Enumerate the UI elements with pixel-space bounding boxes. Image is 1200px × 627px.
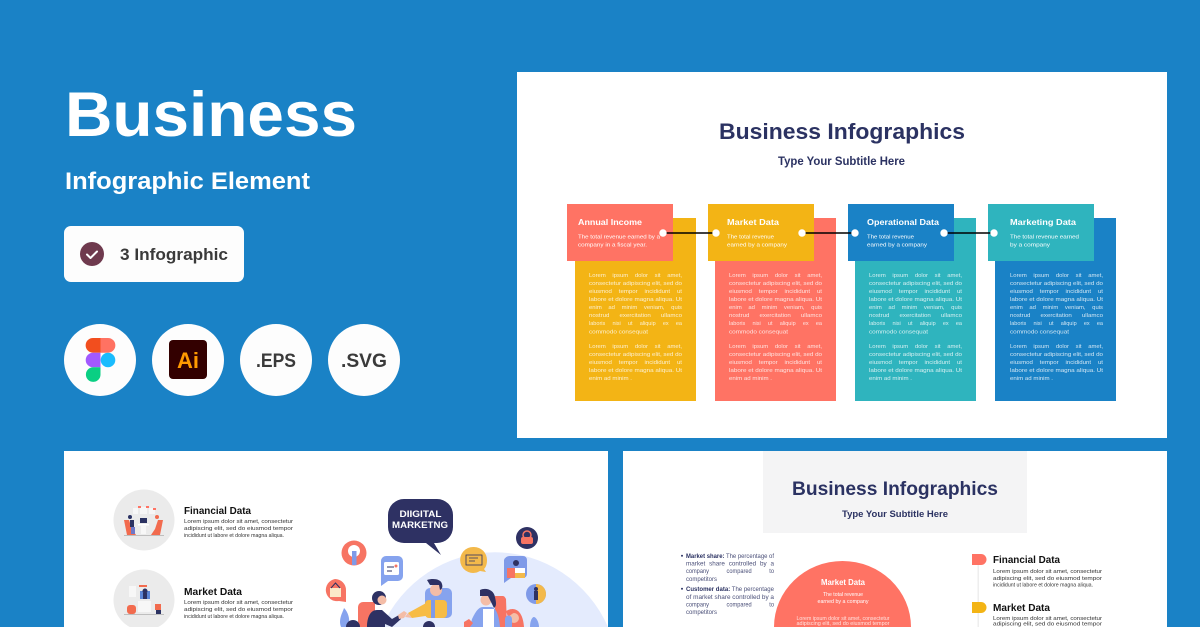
figure: woman in blue xyxy=(464,589,507,627)
icon: meeting illustration xyxy=(124,506,164,536)
bullet list: Customer data: The percentage xyxy=(686,587,775,593)
card: Operational Data: laboris nisi ut aliquip ex ea xyxy=(869,321,963,327)
figure: man in yellow xyxy=(405,579,452,618)
card: Operational Data: Operational Data xyxy=(867,217,939,227)
card: Marketing Data: consectetur adipiscing elit, sed do xyxy=(1010,281,1104,287)
card: Operational Data: eiusmod tempor incididunt ut xyxy=(869,360,962,366)
card: Market Data: enim ad minim . xyxy=(729,376,772,382)
item: Market Data: adipiscing elit, sed do eiusmod tempor xyxy=(184,607,293,613)
card: Marketing Data xyxy=(988,204,1116,401)
card: Market Data: earned by a company xyxy=(727,242,787,248)
card: Operational Data: consectetur adipiscing elit, sed do xyxy=(869,352,963,358)
icon: lock badge xyxy=(516,527,538,549)
item: Financial Data: incididunt ut labore et dolore magna aliqua. xyxy=(184,533,284,539)
icon: EPS xyxy=(240,324,312,396)
icon: location pin xyxy=(342,540,366,566)
card: Annual Income: Annual Income xyxy=(578,217,642,227)
icon: shop bubble xyxy=(326,579,346,602)
item: Market Data: Market Data xyxy=(184,586,242,598)
bullet list xyxy=(681,554,775,616)
item: Financial Data: incididunt ut labore et dolore magna aliqua. xyxy=(993,582,1093,588)
semicircle: Market Data xyxy=(774,561,911,627)
card: Marketing Data: The total revenue earned xyxy=(1010,234,1079,240)
card: Marketing Data: by a company xyxy=(1010,242,1050,248)
card: Annual Income: eiusmod tempor incididunt ut xyxy=(589,360,682,366)
card: Annual Income: laboris nisi ut aliquip ex ea xyxy=(589,321,683,327)
icon: EPS: .EPS xyxy=(256,351,296,372)
card: Operational Data: Lorem ipsum dolor sit amet, xyxy=(869,344,962,350)
card: Annual Income: Lorem ipsum dolor sit amet, xyxy=(589,344,682,350)
card: Operational Data: commodo consequat xyxy=(869,330,928,336)
card: Annual Income: labore et dolore magna aliqua. Ut xyxy=(589,368,682,374)
card: Annual Income: enim ad minim . xyxy=(589,376,632,382)
bullet list: competitors xyxy=(686,610,717,616)
card: Annual Income: The total revenue earned by a xyxy=(578,234,661,240)
card: Market Data: commodo consequat xyxy=(729,330,788,336)
subheading: Type Your Subtitle Here xyxy=(778,156,905,168)
speech bubble: digital marketing: MARKETNG xyxy=(392,520,448,531)
card: Market Data: Market Data xyxy=(727,217,779,227)
icon: profile bubble xyxy=(504,556,527,583)
icon: document bubble xyxy=(381,556,403,586)
header block: Business Infographics xyxy=(792,479,998,500)
panel: market data semicircle xyxy=(623,451,1167,627)
item: Financial Data xyxy=(114,490,293,550)
item: Market Data xyxy=(114,570,293,627)
semicircle: Market Data: earned by a company xyxy=(818,599,869,605)
card: Operational Data: enim ad minim veniam, quis xyxy=(869,305,962,311)
bullet list: company compared to xyxy=(686,569,775,575)
card: Annual Income: Lorem ipsum dolor sit amet, xyxy=(589,273,682,279)
card: Annual Income: consectetur adipiscing elit, sed do xyxy=(589,281,683,287)
bullet list: competitors xyxy=(686,577,717,583)
card: Annual Income: nostrud exercitation ullamco xyxy=(589,313,683,319)
card: Operational Data: labore et dolore magna aliqua. Ut xyxy=(869,297,962,303)
card: Annual Income: company in a fiscal year. xyxy=(578,242,647,248)
icon: message bubble xyxy=(460,547,487,573)
card: Marketing Data: labore et dolore magna aliqua. Ut xyxy=(1010,368,1103,374)
card: Operational Data: Lorem ipsum dolor sit amet, xyxy=(869,273,962,279)
card: Market Data: eiusmod tempor incididunt ut xyxy=(729,289,822,295)
semicircle: Market Data: Lorem ipsum dolor sit amet, consectetur xyxy=(796,616,890,622)
header block: Type Your Subtitle Here xyxy=(842,509,948,520)
subtitle: Infographic Element: Infographic Element xyxy=(65,168,310,195)
icon: person bubble xyxy=(526,584,546,604)
card: Operational Data: consectetur adipiscing elit, sed do xyxy=(869,281,963,287)
card: Market Data: The total revenue xyxy=(727,234,774,240)
icon: SVG xyxy=(328,324,400,396)
bullet list: company compared to xyxy=(686,602,775,608)
card: Operational Data: eiusmod tempor incididunt ut xyxy=(869,289,962,295)
card: Operational Data: earned by a company xyxy=(867,242,927,248)
item: Financial Data: adipiscing elit, sed do eiusmod tempor xyxy=(184,526,293,532)
card: Marketing Data: labore et dolore magna aliqua. Ut xyxy=(1010,297,1103,303)
card: Operational Data: enim ad minim . xyxy=(869,376,912,382)
card: Operational Data: labore et dolore magna aliqua. Ut xyxy=(869,368,962,374)
item: Financial Data: Lorem ipsum dolor sit amet, consectetur xyxy=(184,519,293,525)
badge: 3 Infographic xyxy=(64,226,244,282)
card: Market Data: enim ad minim veniam, quis xyxy=(729,305,822,311)
panel: digital marketing xyxy=(64,451,608,627)
card: Marketing Data: laboris nisi ut aliquip ex ea xyxy=(1010,321,1104,327)
card: Annual Income: consectetur adipiscing elit, sed do xyxy=(589,352,683,358)
card: Market Data: labore et dolore magna aliqua. Ut xyxy=(729,297,822,303)
card: Annual Income: eiusmod tempor incididunt ut xyxy=(589,289,682,295)
panel: four-step infographic xyxy=(517,72,1167,438)
speech bubble: digital marketing xyxy=(388,499,453,555)
badge: 3 Infographic: 3 Infographic xyxy=(120,245,228,264)
title: Business: Business xyxy=(65,80,357,150)
card: Annual Income: commodo consequat xyxy=(589,330,648,336)
card: Market Data: labore et dolore magna aliqua. Ut xyxy=(729,368,822,374)
illustration: team meeting xyxy=(326,499,608,627)
card: Operational Data: nostrud exercitation ullamco xyxy=(869,313,963,319)
card: Annual Income: enim ad minim veniam, quis xyxy=(589,305,682,311)
card: Marketing Data: nostrud exercitation ullamco xyxy=(1010,313,1104,319)
card: Marketing Data: Lorem ipsum dolor sit amet, xyxy=(1010,344,1103,350)
item: Financial Data: Financial Data xyxy=(184,505,251,517)
semicircle: Market Data: The total revenue xyxy=(823,592,863,598)
item: Market Data: Market Data xyxy=(993,602,1050,614)
card: Operational Data xyxy=(848,204,976,401)
card: Marketing Data: consectetur adipiscing elit, sed do xyxy=(1010,352,1104,358)
card: Marketing Data: enim ad minim . xyxy=(1010,376,1053,382)
card: Marketing Data: Marketing Data xyxy=(1010,217,1076,227)
figure: woman in navy xyxy=(340,591,435,627)
card: Market Data: Lorem ipsum dolor sit amet, xyxy=(729,344,822,350)
card: Annual Income xyxy=(567,204,696,401)
icon: Figma xyxy=(64,324,136,396)
card: Market Data xyxy=(708,204,836,401)
card: Market Data: consectetur adipiscing elit, sed do xyxy=(729,281,823,287)
semicircle: Market Data: Market Data xyxy=(821,577,865,587)
card: Market Data: nostrud exercitation ullamco xyxy=(729,313,823,319)
item: Market Data: incididunt ut labore et dolore magna aliqua. xyxy=(184,614,284,620)
icon: SVG: .SVG xyxy=(341,351,387,372)
timeline xyxy=(972,554,1102,627)
figure: woman with red hair xyxy=(505,609,539,627)
item: Market Data: Lorem ipsum dolor sit amet, consectetur xyxy=(184,600,293,606)
item: Market Data xyxy=(972,602,1102,627)
heading: Business Infographics xyxy=(719,119,965,144)
card: Market Data: Lorem ipsum dolor sit amet, xyxy=(729,273,822,279)
card: Market Data: consectetur adipiscing elit, sed do xyxy=(729,352,823,358)
item: Financial Data xyxy=(972,554,1102,588)
bullet list: of market share controlled by a xyxy=(686,595,775,601)
semicircle: Market Data: adipiscing elit, sed do eiusmod tempor xyxy=(796,621,890,627)
connectors between cards xyxy=(659,229,998,237)
card: Market Data: laboris nisi ut aliquip ex ea xyxy=(729,321,823,327)
card: Market Data: eiusmod tempor incididunt ut xyxy=(729,360,822,366)
icon: Adobe Illustrator xyxy=(152,324,224,396)
card: Marketing Data: eiusmod tempor incididunt ut xyxy=(1010,289,1103,295)
item: Financial Data: adipiscing elit, sed do eiusmod tempor xyxy=(993,576,1102,582)
card: Marketing Data: enim ad minim veniam, quis xyxy=(1010,305,1103,311)
icon: presenter illustration xyxy=(124,585,164,615)
icon: Adobe Illustrator: Ai xyxy=(177,348,199,373)
item: Financial Data: Financial Data xyxy=(993,554,1060,566)
card: Marketing Data: eiusmod tempor incididunt ut xyxy=(1010,360,1103,366)
item: Market Data: Lorem ipsum dolor sit amet, consectetur xyxy=(993,616,1102,622)
bullet list: market share controlled by a xyxy=(686,562,775,568)
header block xyxy=(763,451,1027,533)
card: Operational Data: The total revenue xyxy=(867,234,914,240)
item: Financial Data: Lorem ipsum dolor sit amet, consectetur xyxy=(993,569,1102,575)
bullet list: Market share: The percentage of xyxy=(686,554,774,560)
speech bubble: digital marketing: DIIGITAL xyxy=(400,509,442,520)
card: Marketing Data: commodo consequat xyxy=(1010,330,1069,336)
card: Marketing Data: Lorem ipsum dolor sit amet, xyxy=(1010,273,1103,279)
card: Annual Income: labore et dolore magna aliqua. Ut xyxy=(589,297,682,303)
